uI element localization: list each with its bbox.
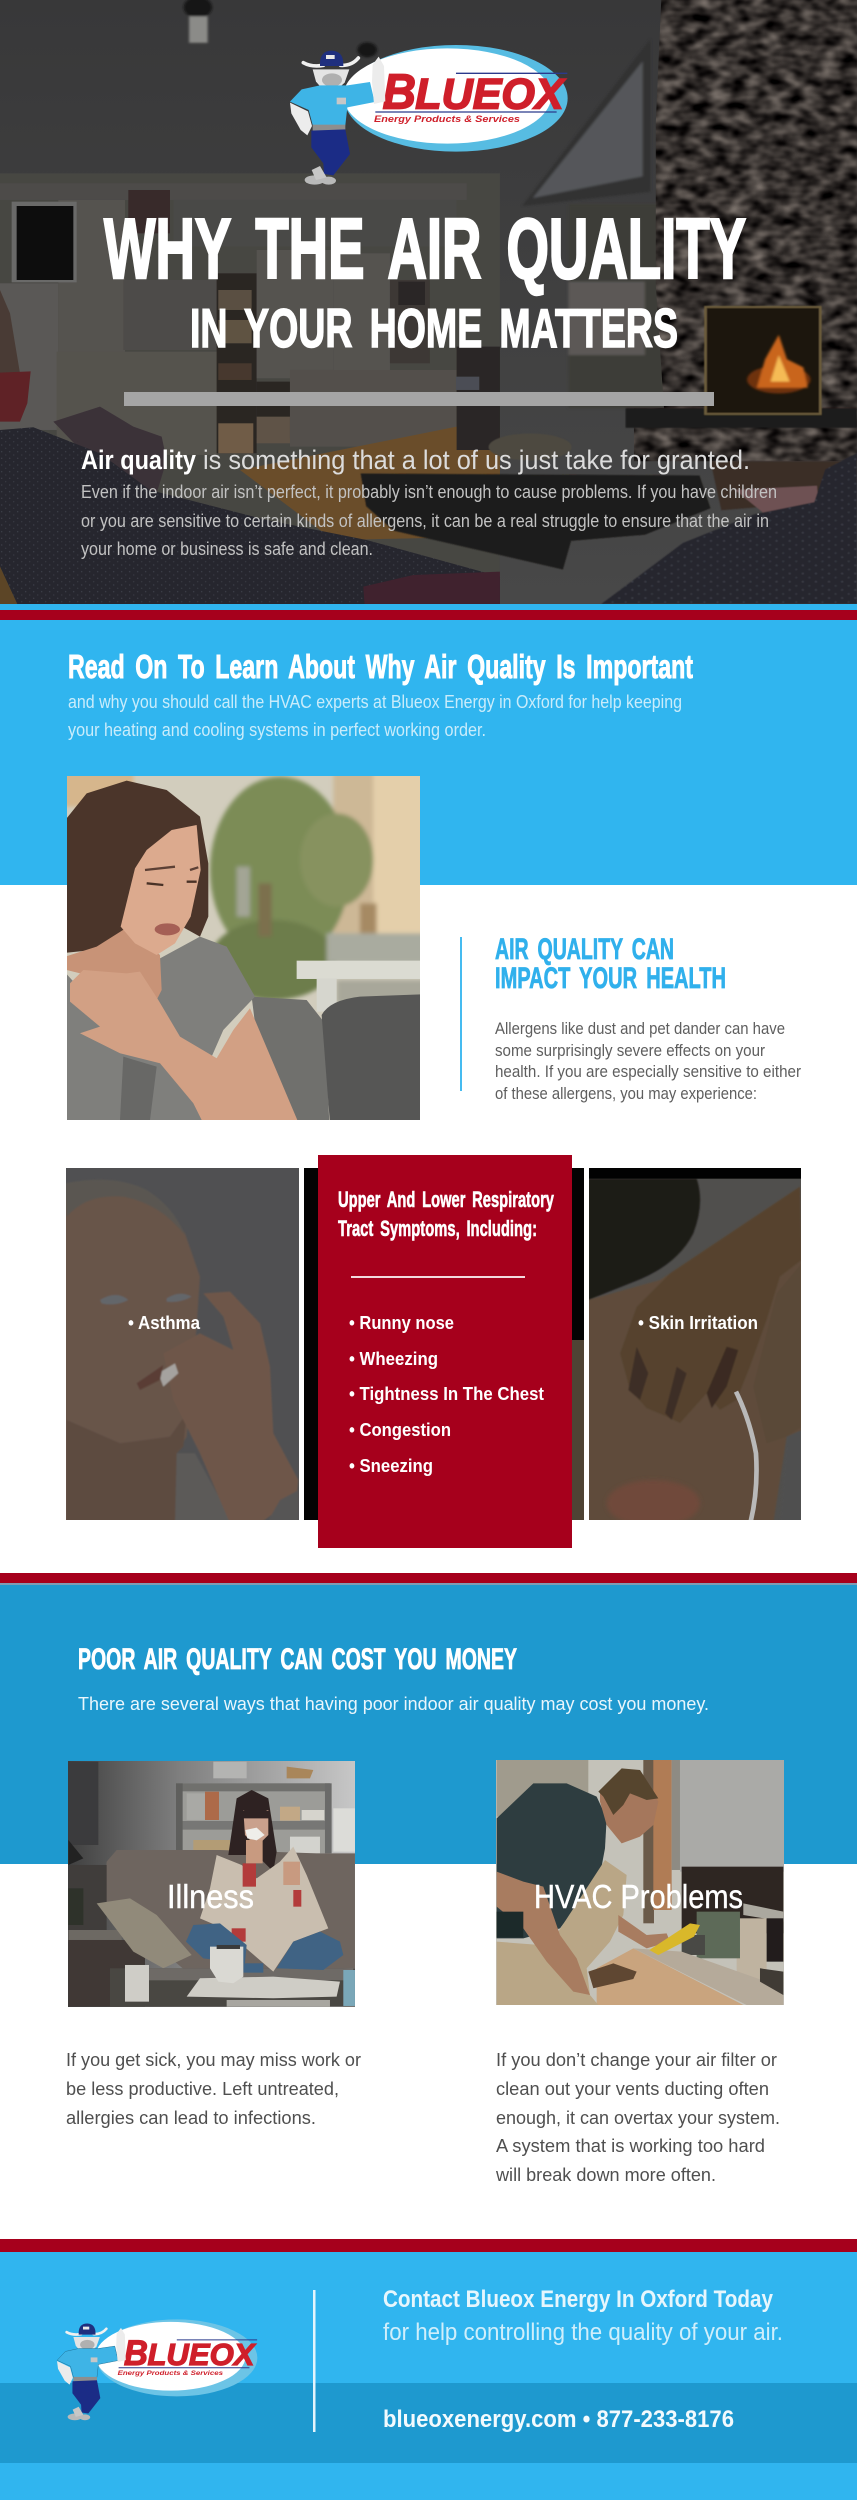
footer contact text: Contact Blueox Energy In Oxford Today [383, 2286, 774, 2313]
footer vertical divider [313, 2290, 316, 2432]
intro paragraph: your home or business is safe and clean. [81, 539, 373, 559]
HVAC text [495, 2050, 780, 2185]
illness text: allergies can lead to infections. [66, 2108, 316, 2128]
illness text [66, 2050, 361, 2128]
panel heading [338, 1187, 555, 1241]
heading: air quality can impact your health: AIR QUALITY CAN [495, 933, 674, 966]
footer logo: LUEOX [147, 2337, 257, 2372]
HVAC text: clean out your vents ducting often [496, 2079, 769, 2099]
section divider stripe [0, 1573, 857, 1585]
background bands [0, 620, 857, 2239]
photo panel: skin irritation [589, 1168, 801, 1520]
hero bottom stripes [0, 604, 857, 620]
photo: illness [68, 1761, 355, 2007]
photo: HVAC technician [496, 1760, 784, 2005]
logo: Blueox mascot and oval [290, 45, 568, 185]
symptom list: • Congestion [349, 1420, 451, 1440]
label: asthma: • Asthma [128, 1313, 201, 1333]
heading: air quality can impact your health: IMPACT YOUR HEALTH [495, 962, 726, 995]
label: illness: Illness [167, 1878, 254, 1915]
intro lead: Air quality [81, 445, 196, 475]
footer logo: Energy Products & Services [118, 2370, 223, 2377]
logo wordmark: Energy Products & Services [374, 114, 520, 124]
panel heading: Tract Symptoms, Including: [338, 1216, 537, 1241]
photo: woman holding chest [67, 776, 420, 1120]
health text [495, 1019, 801, 1103]
photo panel: centre background [304, 1168, 584, 1520]
health text: of these allergens, you may experience: [495, 1084, 757, 1103]
HVAC text: If you don’t change your air filter or [496, 2050, 777, 2070]
intro paragraph: Even if the indoor air isn’t perfect, it probably isn’t enough to cause problems. If you have children [81, 482, 777, 502]
symptom list [349, 1313, 544, 1476]
section intro text: and why you should call the HVAC experts at Blueox Energy in Oxford for help keeping [68, 692, 682, 712]
label: HVAC problems: HVAC Problems [534, 1878, 743, 1915]
footer contact text: for help controlling the quality of your air. [383, 2319, 783, 2346]
footer contact text [383, 2286, 783, 2346]
logo wordmark: LUEOX [415, 70, 566, 118]
title [104, 202, 746, 359]
footer logo [57, 2319, 257, 2420]
heading: poor air quality: POOR AIR QUALITY CAN COST YOU MONEY [78, 1643, 517, 1676]
money intro text: There are several ways that having poor indoor air quality may cost you money. [78, 1693, 709, 1714]
HVAC text: enough, it can overtax your system. [496, 2108, 780, 2128]
logo mascot [290, 51, 385, 185]
health text: health. If you are especially sensitive to either [495, 1062, 801, 1081]
intro paragraph [81, 482, 777, 559]
logo wordmark: B [383, 64, 416, 119]
logo wordmark [374, 64, 567, 124]
panel heading: Upper And Lower Respiratory [338, 1187, 555, 1212]
health text: some surprisingly severe effects on your [495, 1041, 765, 1060]
footer website and phone: blueoxenergy.com • 877-233-8176 [383, 2406, 734, 2433]
title divider bar [124, 392, 714, 406]
health vertical rule [460, 937, 462, 1091]
health text: Allergens like dust and pet dander can have [495, 1019, 785, 1038]
illness text: be less productive. Left untreated, [66, 2079, 339, 2099]
symptom list: • Sneezing [349, 1456, 433, 1476]
section intro text [68, 692, 682, 740]
symptom list: • Runny nose [349, 1313, 454, 1333]
footer logo: B [124, 2333, 148, 2373]
hero photo: living room with fireplace [0, 0, 857, 604]
intro lead: is something that a lot of us just take for granted. [203, 445, 750, 475]
footer bands [0, 2239, 857, 2500]
symptom list: • Tightness In The Chest [349, 1384, 544, 1404]
photo panel: asthma [66, 1168, 299, 1520]
red symptoms panel [318, 1155, 572, 1548]
intro paragraph: or you are sensitive to certain kinds of allergens, it can be a real struggle to ensure that the air in [81, 511, 769, 531]
logo oval [343, 45, 568, 152]
HVAC text: A system that is working too hard [496, 2136, 765, 2156]
symptom list: • Wheezing [349, 1349, 438, 1369]
illness text: If you get sick, you may miss work or [66, 2050, 361, 2070]
label: skin irritation: • Skin Irritation [638, 1313, 758, 1333]
heading: air quality can impact your health [495, 933, 726, 995]
HVAC text: will break down more often. [495, 2165, 716, 2185]
section intro text: your heating and cooling systems in perfect working order. [68, 720, 486, 740]
